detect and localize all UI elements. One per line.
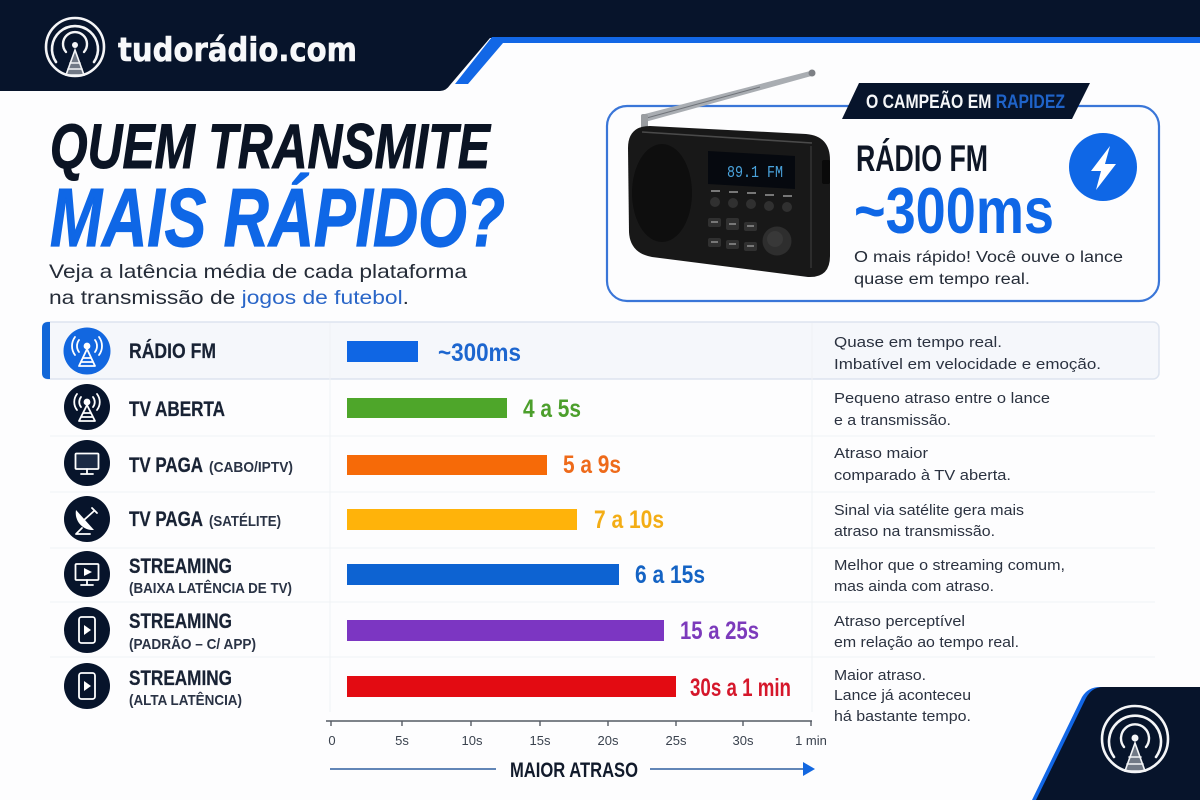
description <box>834 558 1065 595</box>
chart axis: 20s <box>598 733 619 748</box>
bar <box>347 341 418 362</box>
label <box>129 667 242 709</box>
title <box>50 112 505 264</box>
arrow: maior atraso <box>330 759 815 782</box>
value: ~300ms: ~300ms <box>854 174 1054 247</box>
description: Pequeno atraso entre o lance <box>834 391 1050 407</box>
label: TV ABERTA <box>129 398 225 421</box>
row: tv paga cabo <box>64 440 1011 486</box>
label: (PADRÃO – C/ APP) <box>129 635 256 653</box>
bar <box>347 620 664 641</box>
description <box>834 446 1011 484</box>
chart axis: 1 min <box>795 733 827 748</box>
wordmark: tudorádio.com <box>118 30 357 69</box>
label <box>129 555 292 597</box>
label: STREAMING <box>129 667 232 690</box>
value: 15 a 25s <box>680 617 759 645</box>
description <box>834 391 1050 429</box>
label: RÁDIO FM <box>129 340 216 363</box>
icon: tv tower <box>64 384 110 430</box>
description: Atraso maior <box>834 446 928 462</box>
description: em relação ao tempo real. <box>834 635 1019 651</box>
badge: o campeão em rapidez <box>842 83 1090 119</box>
description: Lance já aconteceu <box>834 688 971 704</box>
icon: broadcast tower logo <box>1102 706 1168 772</box>
champion description <box>854 249 1123 288</box>
label: (ALTA LATÊNCIA) <box>129 691 242 709</box>
heading: rádio fm: RÁDIO FM <box>856 138 988 179</box>
description: Maior atraso. <box>834 668 926 684</box>
bar <box>347 564 619 585</box>
label: (CABO/IPTV) <box>209 459 293 476</box>
description line: rádio fm: Imbatível em velocidade e emoção. <box>834 357 1101 373</box>
icon: tv monitor <box>64 440 110 486</box>
icon: radio tower blue <box>64 328 110 374</box>
subtitle: Veja a latência média de cada plataforma <box>49 261 467 283</box>
value: 6 a 15s <box>635 561 705 589</box>
description: mas ainda com atraso. <box>834 579 994 595</box>
description <box>834 503 1024 540</box>
title: MAIS RÁPIDO? <box>50 171 505 264</box>
label: (SATÉLITE) <box>209 513 281 530</box>
label: STREAMING <box>129 610 232 633</box>
icon: phone play <box>64 607 110 653</box>
label <box>129 454 293 477</box>
description: Atraso perceptível <box>834 614 965 630</box>
bar <box>347 398 507 418</box>
value: 30s a 1 min <box>690 674 791 702</box>
radio illustration <box>628 70 830 277</box>
label: (BAIXA LATÊNCIA DE TV) <box>129 579 292 597</box>
panel: champion FM radio <box>607 70 1159 301</box>
label: STREAMING <box>129 555 232 578</box>
row: rádio fm <box>64 328 1002 374</box>
header band <box>0 0 1200 91</box>
chart axis: 0 <box>328 733 336 748</box>
champion description: O mais rápido! Você ouve o lance <box>854 249 1123 266</box>
label <box>129 610 256 653</box>
subtitle <box>49 261 467 309</box>
value: 5 a 9s <box>563 451 621 479</box>
chart axis: 25s <box>666 733 687 748</box>
label: TV PAGA <box>129 508 203 531</box>
chart axis <box>326 721 827 748</box>
chart axis: 30s <box>733 733 754 748</box>
value: 4 a 5s <box>523 395 581 423</box>
chart axis: 15s <box>530 733 551 748</box>
description: há bastante tempo. <box>834 709 971 725</box>
subtitle: na transmissão de jogos de futebol . <box>49 287 409 309</box>
description: comparado à TV aberta. <box>834 468 1011 484</box>
title: QUEM TRANSMITE <box>50 112 492 182</box>
icon: lightning bolt <box>1069 133 1137 201</box>
highlighted row background <box>42 322 1159 379</box>
corner band with logo <box>1032 687 1200 800</box>
bar <box>347 676 676 697</box>
row: tv aberta <box>64 384 1050 430</box>
description: e a transmissão. <box>834 413 951 429</box>
row: streaming padrão <box>64 607 1019 653</box>
icon: broadcast tower logo <box>46 18 104 76</box>
description: atraso na transmissão. <box>834 524 995 540</box>
champion description: quase em tempo real. <box>854 271 1030 288</box>
chart axis: 10s <box>462 733 483 748</box>
description: Sinal via satélite gera mais <box>834 503 1024 519</box>
label: TV PAGA <box>129 454 203 477</box>
chart axis: 5s <box>395 733 409 748</box>
value: 7 a 10s <box>594 506 664 534</box>
description: Quase em tempo real. <box>834 335 1002 351</box>
icon: tv play <box>64 551 110 597</box>
badge: o campeão em rapidez: O CAMPEÃO EM RAPIDEZ <box>866 90 1065 113</box>
row: streaming baixa latência <box>64 551 1065 597</box>
row: tv paga satélite <box>64 496 1024 542</box>
value: ~300ms <box>438 339 521 367</box>
label <box>129 508 281 531</box>
arrow: maior atraso: MAIOR ATRASO <box>510 759 638 782</box>
bar <box>347 509 577 530</box>
icon: satellite dish <box>64 496 110 542</box>
description <box>834 668 971 725</box>
radio illustration: 89.1 FM <box>727 164 783 183</box>
icon: phone play <box>64 663 110 709</box>
logo: tudorádio.com <box>46 18 357 76</box>
description <box>834 614 1019 651</box>
description: Melhor que o streaming comum, <box>834 558 1065 574</box>
bar <box>347 455 547 475</box>
row: streaming alta latência <box>64 663 971 725</box>
